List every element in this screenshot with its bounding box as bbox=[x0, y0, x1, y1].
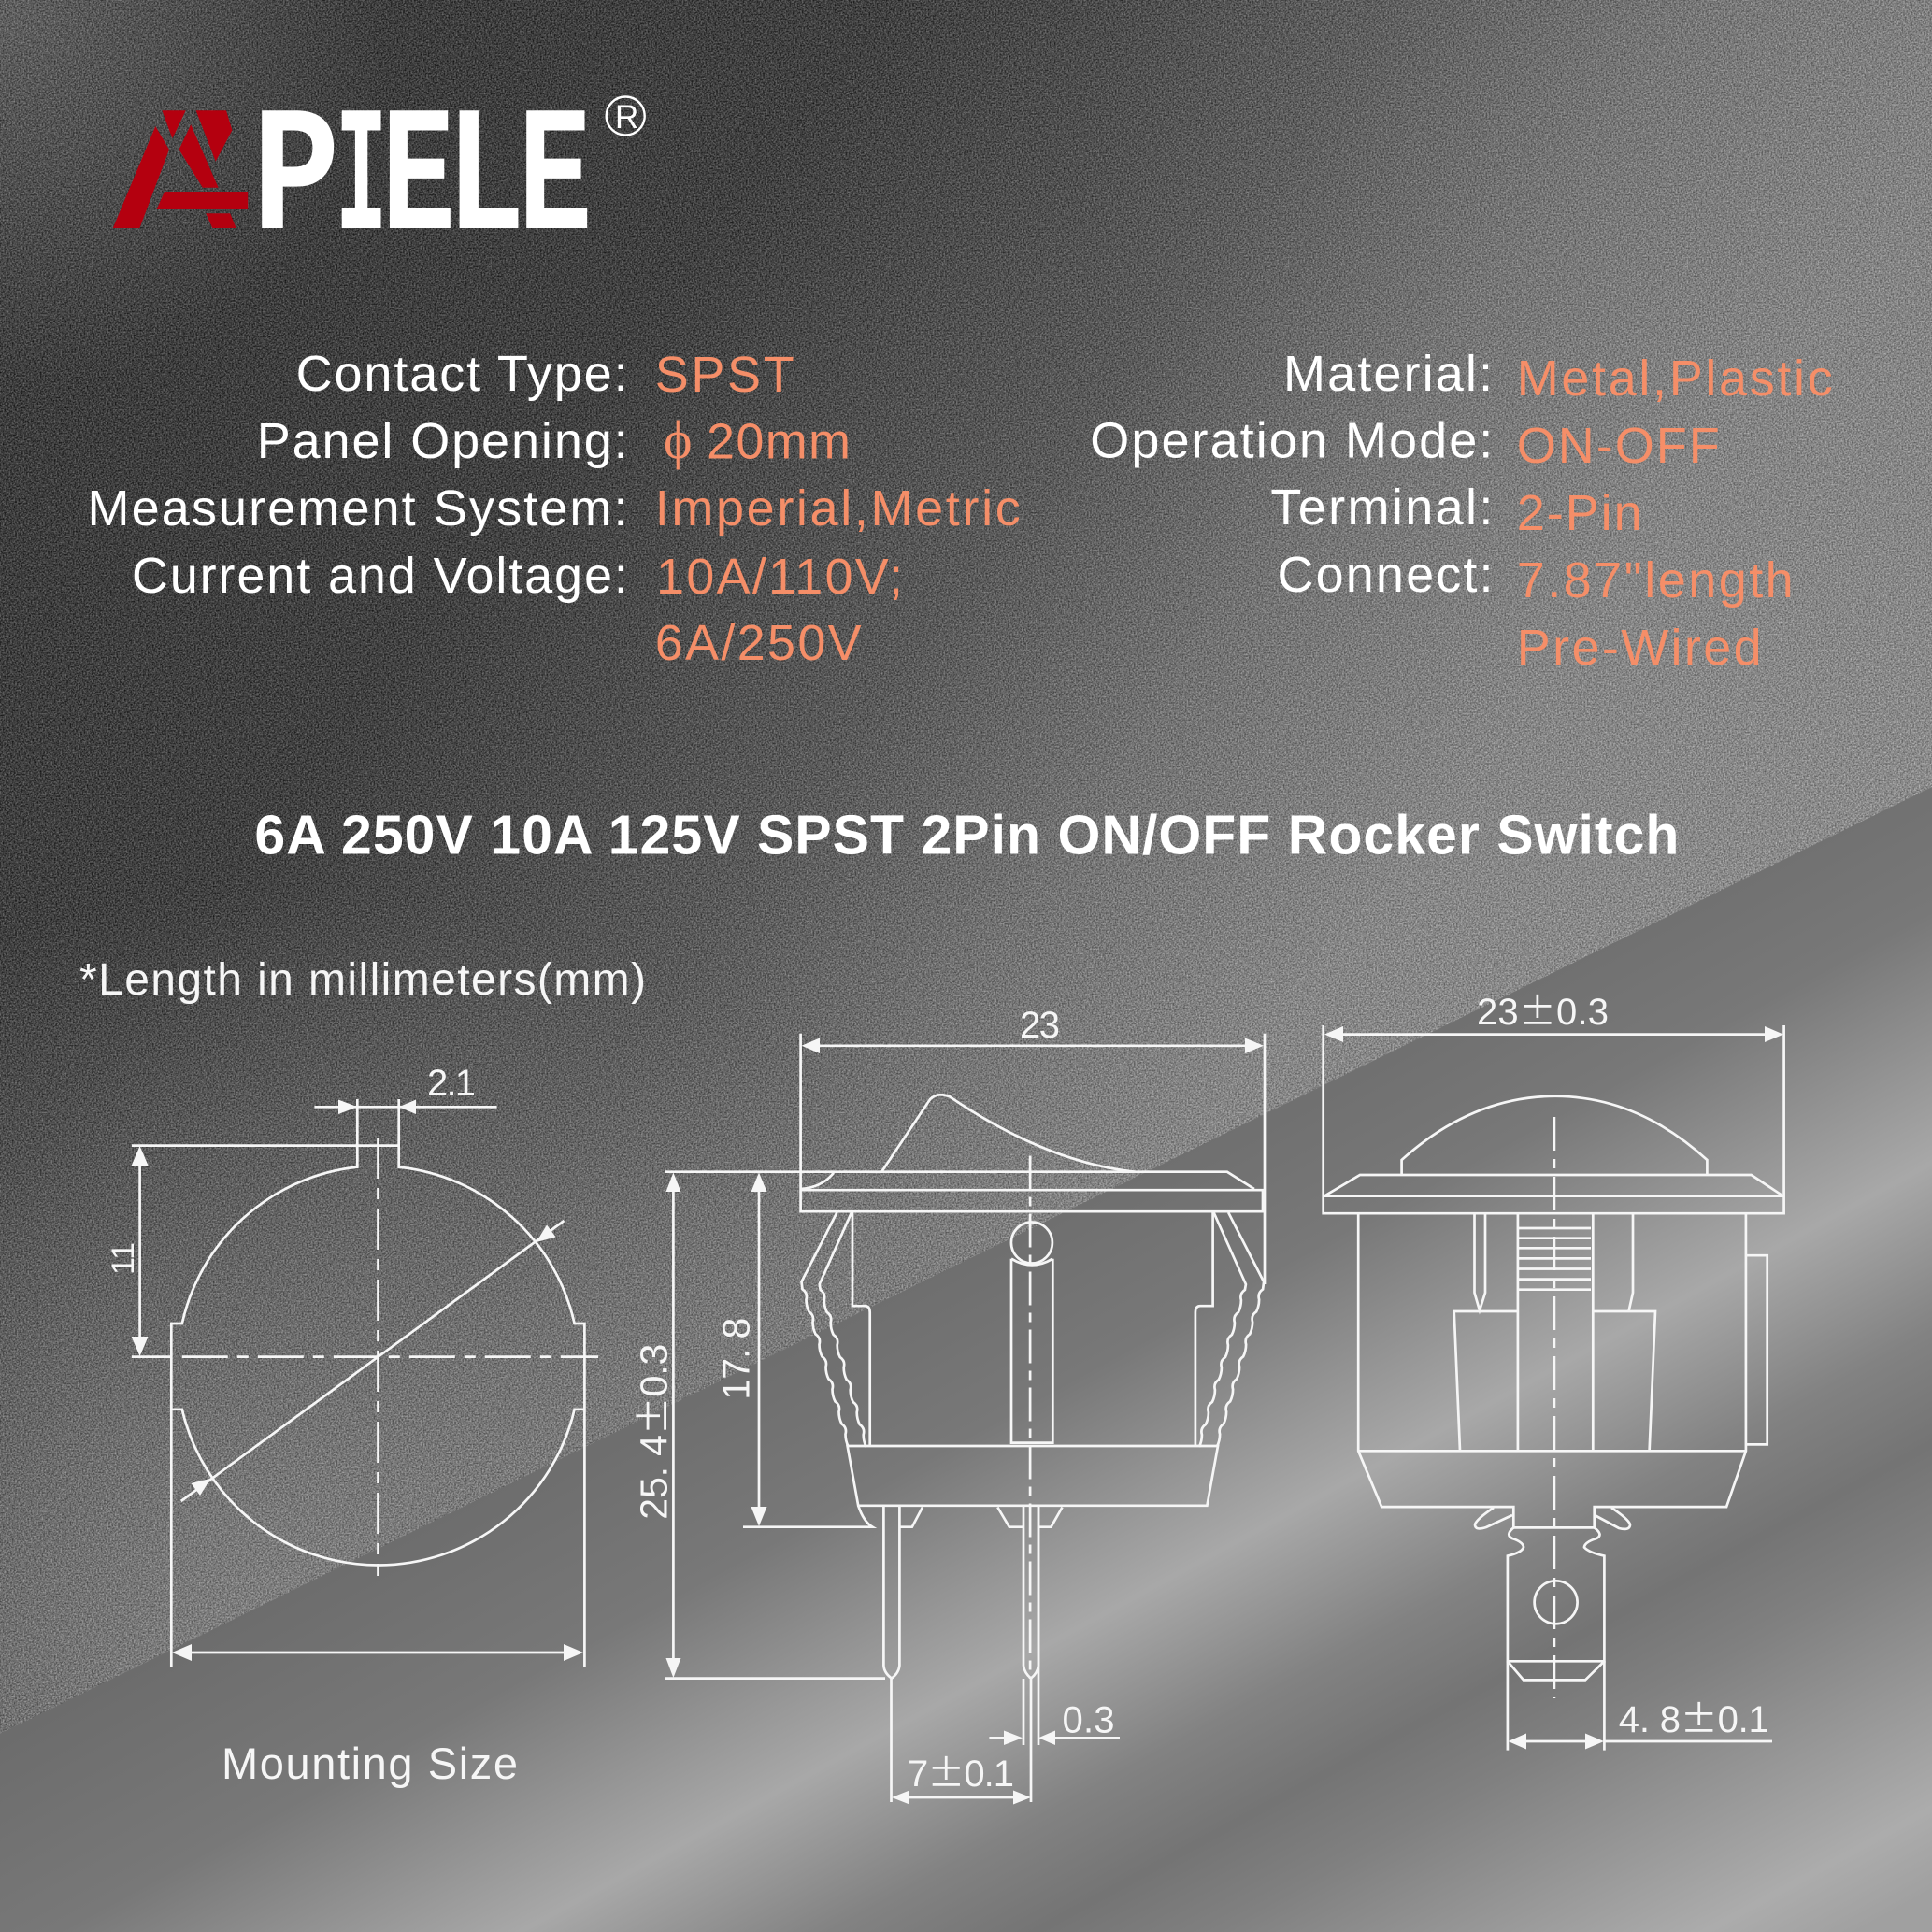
spec: terminal bbox=[1270, 479, 1642, 541]
title: 6A 250V 10A 125V SPST 2Pin ON/OFF Rocker Switch bbox=[254, 804, 1679, 866]
spec: operation mode: Operation Mode: bbox=[1090, 413, 1493, 469]
spec: current and voltage: 10A/110V; bbox=[656, 549, 903, 605]
dimension: 17.8: 17. 8 bbox=[715, 1318, 758, 1400]
logo wordmark: E bbox=[381, 80, 455, 282]
spec: panel opening: 20mm bbox=[707, 413, 851, 469]
spec: connect: 7.87"length bbox=[1517, 552, 1794, 608]
spec: current and voltage: 6A/250V bbox=[655, 615, 862, 671]
spec: operation mode bbox=[1090, 413, 1720, 474]
dimension arrows bbox=[665, 1038, 1264, 1804]
spec: operation mode: ON-OFF bbox=[1517, 418, 1720, 474]
spec: terminal: 2-Pin bbox=[1517, 485, 1642, 541]
diagram: mounting size bbox=[106, 1063, 598, 1788]
spec: measurement system bbox=[88, 480, 1021, 537]
spec: measurement system: Imperial,Metric bbox=[655, 480, 1021, 537]
registered mark bbox=[607, 97, 645, 136]
spec: contact type: SPST bbox=[655, 347, 794, 403]
spec: contact type: Contact Type: bbox=[296, 346, 628, 402]
specification list: right column bbox=[1090, 346, 1833, 676]
dimension arrows bbox=[1324, 1026, 1783, 1750]
registered mark: R bbox=[615, 99, 638, 136]
spec: measurement system: Measurement System: bbox=[88, 480, 628, 537]
dimension: 7 tolerance: 7±0.1 bbox=[908, 1743, 1014, 1797]
spec: material: Material: bbox=[1283, 346, 1493, 402]
dimension: 25.4: 25. 4±0.3 bbox=[623, 1344, 679, 1520]
logo wordmark bbox=[252, 80, 592, 282]
spec: panel opening bbox=[257, 409, 851, 470]
dimension: 11: 11 bbox=[106, 1242, 141, 1275]
dimension: 23 tolerance: 23±0.3 bbox=[1477, 981, 1609, 1036]
spec: material: Metal,Plastic bbox=[1517, 351, 1833, 407]
logo wordmark: E bbox=[518, 80, 592, 282]
logo wordmark: P bbox=[252, 81, 340, 282]
diagram: switch front view bbox=[1324, 981, 1784, 1751]
logo wordmark: L bbox=[446, 80, 525, 282]
dimension arrows bbox=[132, 1099, 583, 1661]
logo: APIELE bbox=[113, 80, 645, 282]
mounting cutout outline bbox=[132, 1099, 598, 1667]
specification list: left column bbox=[88, 346, 1021, 671]
switch front outline bbox=[1324, 1025, 1784, 1751]
spec: connect: Pre-Wired bbox=[1517, 620, 1762, 676]
dimension: 4.8 tolerance: 4. 8±0.1 bbox=[1619, 1689, 1769, 1743]
switch housing outline bbox=[665, 1034, 1265, 1802]
spec: current and voltage bbox=[132, 548, 903, 671]
dimension: 0.3: 0.3 bbox=[1062, 1700, 1114, 1741]
spec: terminal: Terminal: bbox=[1270, 479, 1493, 536]
spec: current and voltage: Current and Voltage: bbox=[132, 548, 628, 604]
icon: red A mark bbox=[113, 110, 248, 228]
spec: material bbox=[1283, 346, 1833, 407]
logo wordmark: I bbox=[335, 81, 388, 282]
spec: connect: Connect: bbox=[1277, 547, 1494, 603]
spec: connect bbox=[1277, 547, 1794, 676]
caption: mounting size: Mounting Size bbox=[222, 1739, 518, 1788]
note: units: *Length in millimeters(mm) bbox=[79, 955, 646, 1005]
spec: panel opening: ϕ bbox=[664, 409, 693, 470]
diagram: switch side view bbox=[623, 1005, 1265, 1804]
spec: panel opening: Panel Opening: bbox=[257, 413, 628, 469]
dimension: 23: 23 bbox=[1020, 1005, 1060, 1046]
spec: contact type bbox=[296, 346, 794, 403]
dimension: 2.1: 2.1 bbox=[427, 1063, 476, 1104]
